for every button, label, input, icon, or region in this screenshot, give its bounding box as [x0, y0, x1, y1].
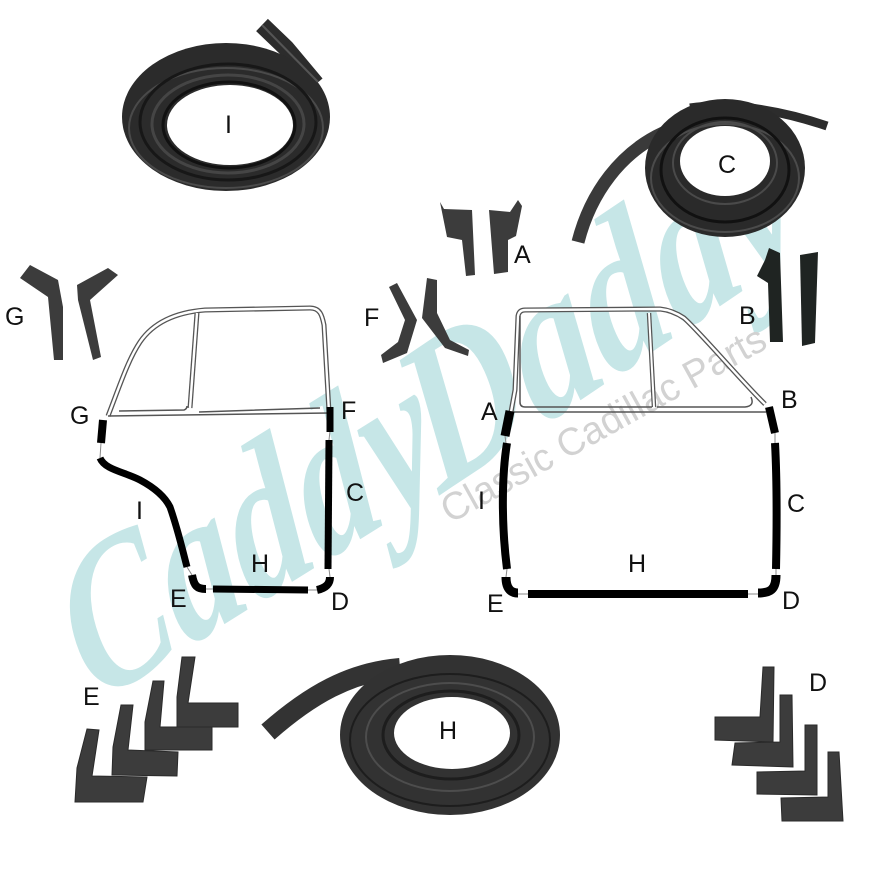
left door seal segments: [100, 407, 330, 590]
right door labels: B: [739, 302, 756, 330]
right door labels: H: [628, 550, 646, 578]
label F part: F: [364, 304, 379, 332]
label H coil: H: [439, 717, 457, 745]
watermark: Classic Cadillac Parts: Classic Cadillac Parts: [434, 317, 774, 532]
left door labels: F: [341, 397, 356, 425]
left door labels: I: [136, 497, 143, 525]
coil C: [578, 99, 827, 242]
label I coil: I: [225, 111, 232, 139]
part B: [757, 248, 818, 346]
right door labels: D: [782, 587, 800, 615]
left door window frame: [108, 308, 329, 416]
right door labels: I: [478, 487, 485, 515]
label E part: E: [83, 683, 100, 711]
part E brackets: [75, 657, 238, 802]
left door labels: E: [170, 585, 187, 613]
coil I: [122, 25, 330, 191]
watermark: Caddy Daddy script: Caddy: [26, 310, 469, 747]
label C coil: C: [718, 151, 736, 179]
right door seal segments: [503, 407, 777, 594]
left door labels: G: [70, 402, 89, 430]
label A part: A: [514, 241, 531, 269]
label G part: G: [5, 303, 24, 331]
right door labels: [478, 302, 805, 618]
watermark: Caddy Daddy script: [26, 73, 832, 747]
left door labels: C: [346, 479, 364, 507]
coil H: [268, 655, 560, 815]
part G: [20, 265, 118, 360]
right door labels: B: [781, 386, 798, 414]
right door diagram: [478, 302, 805, 618]
part F: [381, 278, 469, 363]
left door labels: H: [251, 550, 269, 578]
part D brackets: [715, 667, 843, 821]
left door labels: [70, 397, 364, 616]
right door labels: E: [487, 590, 504, 618]
left door labels: D: [331, 588, 349, 616]
part A: [440, 200, 522, 276]
left door diagram: [70, 308, 364, 616]
right door labels: C: [787, 490, 805, 518]
right door window frame: [510, 309, 766, 412]
label D part: D: [809, 669, 827, 697]
right door labels: A: [481, 398, 498, 426]
